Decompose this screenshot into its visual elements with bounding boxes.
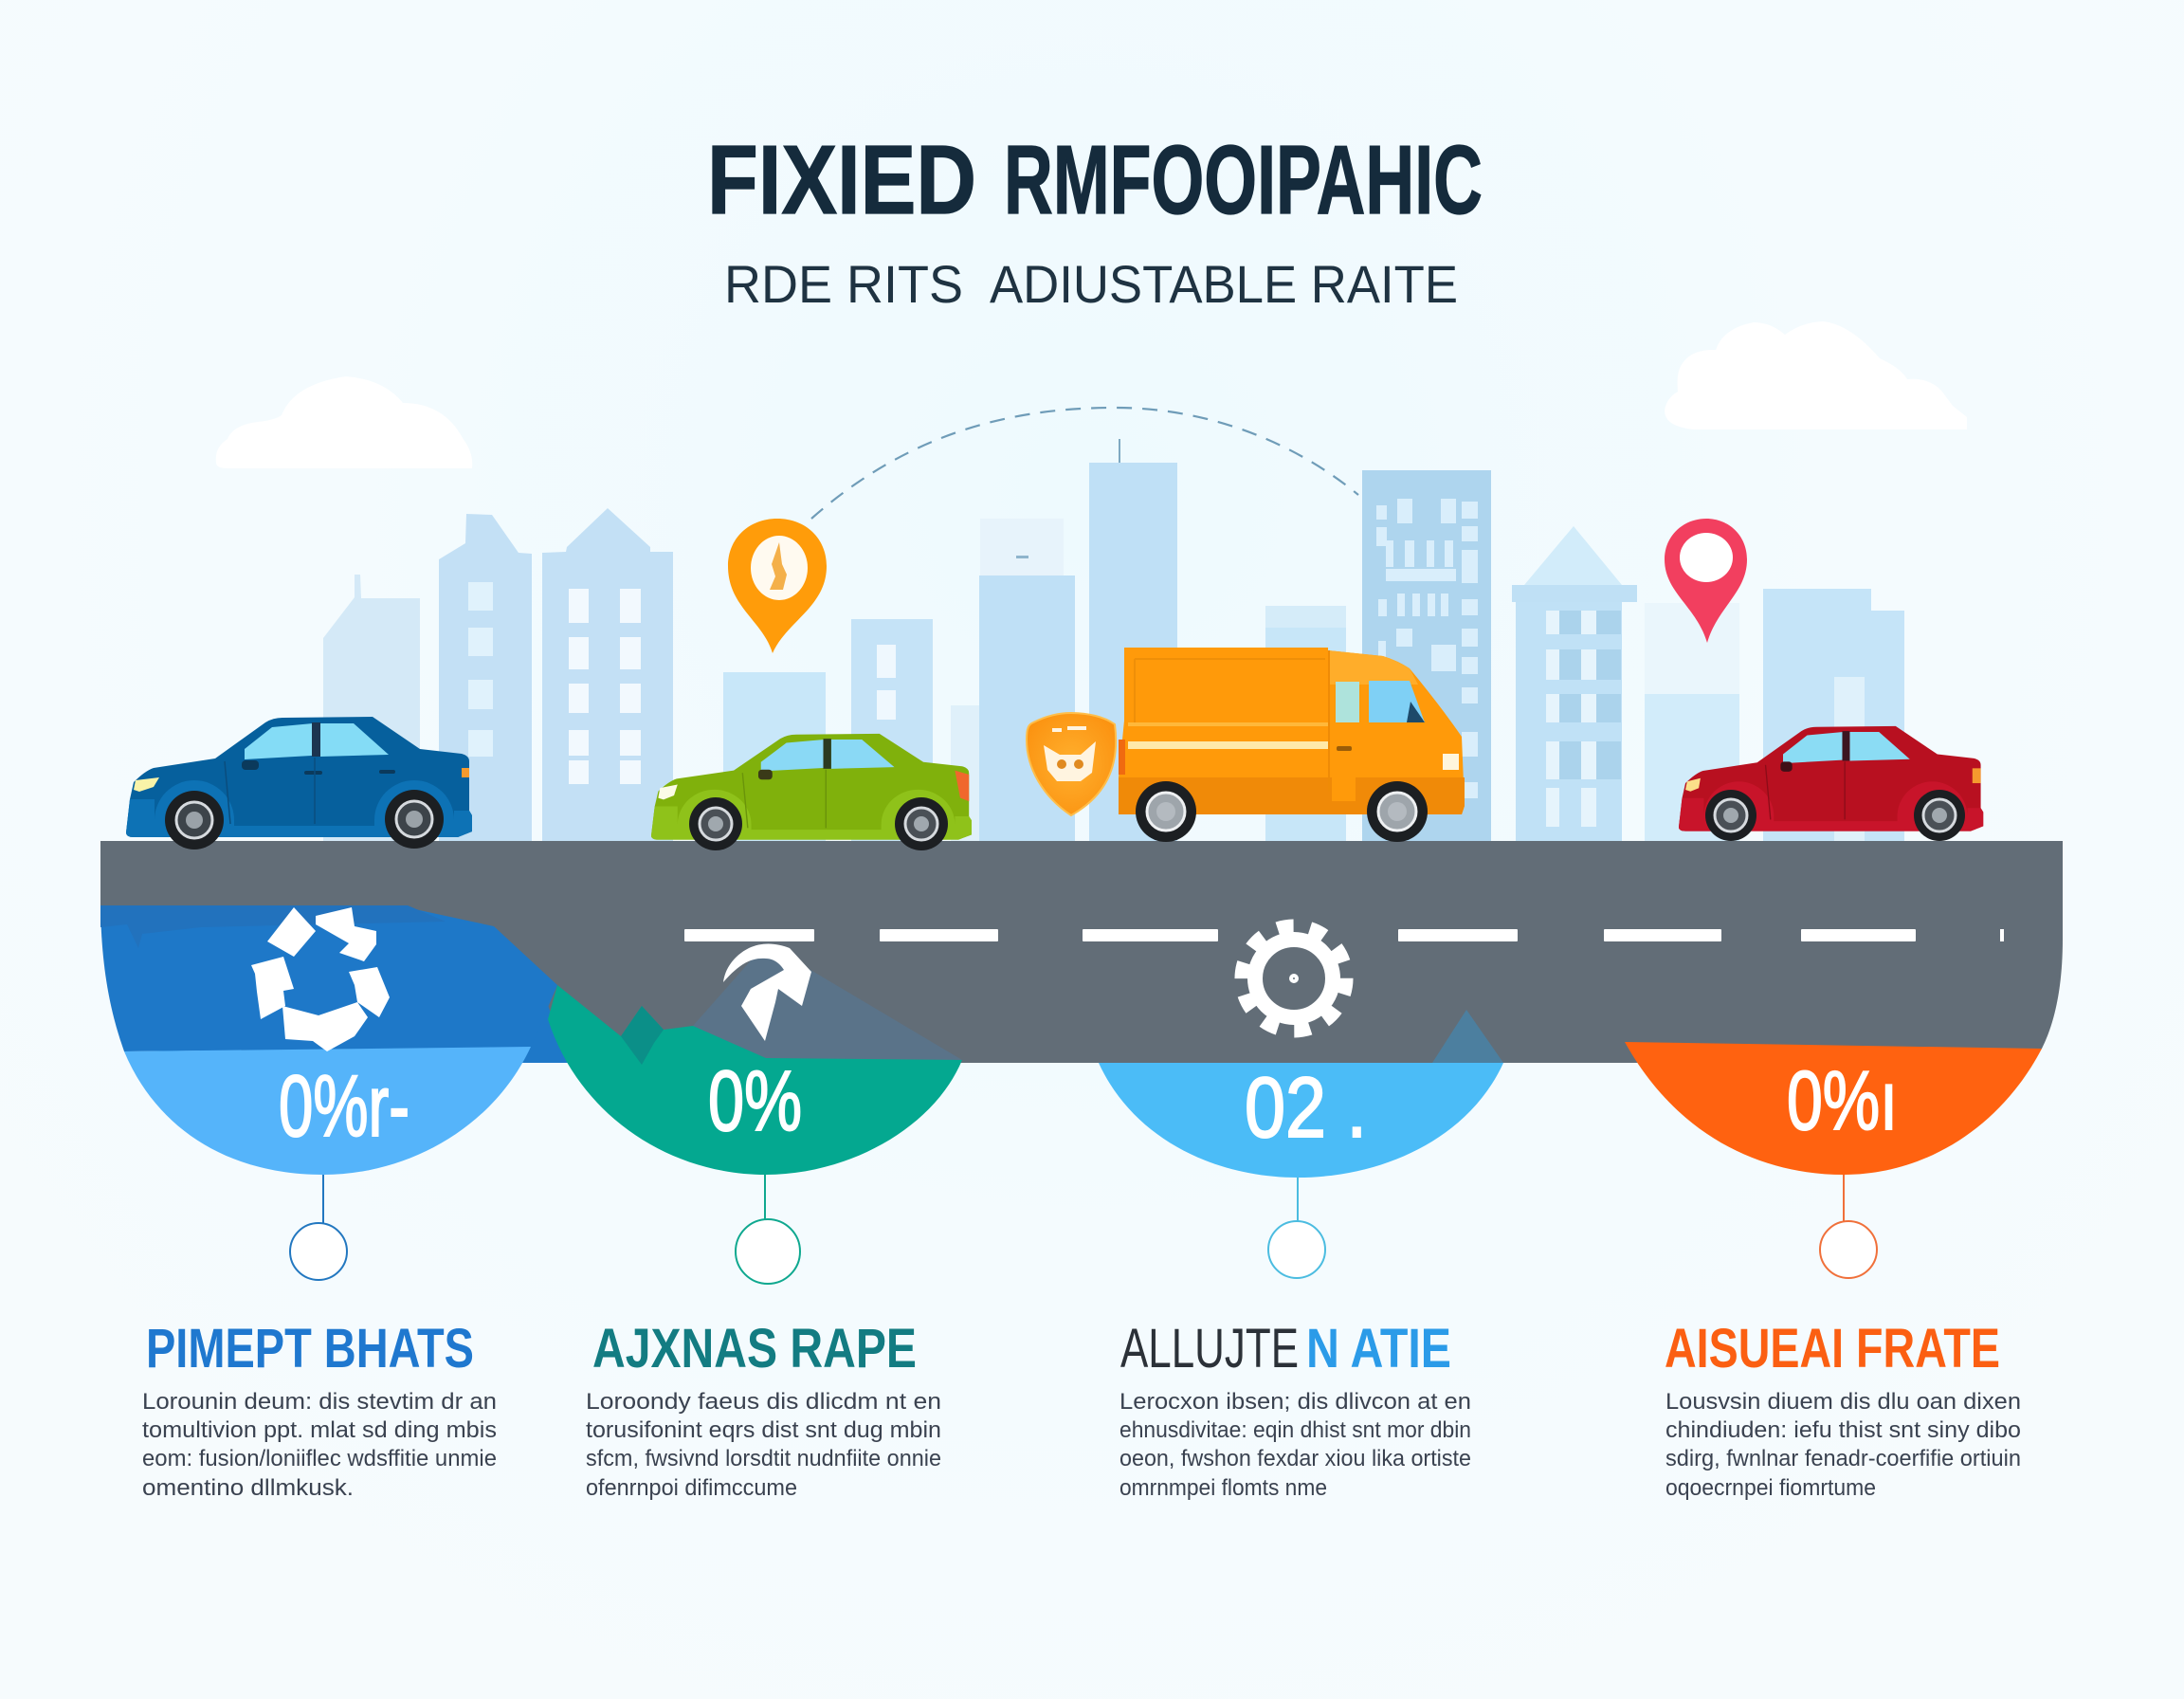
heading 4: AISUEAI FRATE (1665, 1318, 2000, 1379)
icon: gear (1242, 926, 1346, 1031)
percent 2: 0% (708, 1054, 802, 1149)
red car (1679, 726, 1983, 841)
percent 4: 0%ı (1787, 1053, 1898, 1147)
body text 4: sdirg, fwnlnar fenadr-coerfifie ortiuin (1665, 1446, 2021, 1471)
heading 3: ALLUJTE (1120, 1318, 1299, 1379)
bowl 4 orange (1625, 1042, 2042, 1175)
title (707, 125, 1483, 234)
subtitle (724, 254, 1458, 314)
building centre (851, 619, 933, 841)
blue car (126, 717, 472, 850)
shield badge (1027, 713, 1116, 815)
bowl 1 blue (100, 905, 557, 1175)
percent 1: 0%r- (279, 1058, 410, 1155)
body text 3: oeon, fwshon fexdar xiou lika ortiste (1119, 1446, 1471, 1471)
percent 3: 02 . (1245, 1061, 1367, 1156)
icon: curved arrow (723, 943, 811, 1041)
connector marker 4 (1820, 1175, 1877, 1278)
gabled building right (1512, 526, 1637, 841)
body text 2: sfcm, fwsivnd lorsdtit nudnfiite onnie (586, 1446, 941, 1471)
map pin orange (728, 519, 827, 653)
pale building far right (1645, 603, 1739, 841)
building low centre left (723, 672, 826, 841)
body text 4 (1665, 1389, 2021, 1501)
body text 4: Lousvsin diuem dis dlu oan dixen (1665, 1389, 2021, 1415)
bowl 2 teal (548, 943, 962, 1175)
body text 2: Loroondy faeus dis dlicdm nt en (586, 1389, 941, 1415)
heading 3: N ATIE (1306, 1318, 1451, 1379)
cloud right (1665, 321, 1967, 429)
body text 3: Lerocxon ibsen; dis dlivcon at en (1119, 1389, 1471, 1415)
body text 2: ofenrnpoi difimccume (586, 1475, 797, 1501)
road (100, 841, 2063, 1063)
connector marker 3 (1268, 1178, 1325, 1278)
body text 1: omentino dllmkusk. (142, 1475, 354, 1501)
body text 1 (142, 1389, 497, 1501)
building far right (1763, 589, 1904, 841)
column 4 text (1665, 1318, 2021, 1501)
pale low building (951, 705, 980, 841)
map pin red (1665, 519, 1747, 643)
body text 3 (1119, 1389, 1471, 1501)
column 2 text (586, 1318, 941, 1501)
title: RMFOOIPAHIC (1004, 125, 1483, 234)
column 3 text (1119, 1318, 1471, 1501)
heading 1: PIMEPT BHATS (146, 1318, 474, 1379)
body text 1: eom: fusion/loniiflec wdsffitie unmie (142, 1446, 497, 1471)
body text 2: torusifonint eqrs dist snt dug mbin (586, 1417, 941, 1443)
subtitle: RDE RITS (724, 254, 963, 314)
title: FIXIED (707, 125, 976, 234)
column 1 text (142, 1318, 497, 1501)
tower (1089, 439, 1177, 841)
windowed tower (1362, 470, 1491, 841)
body text 1: Lorounin deum: dis stevtim dr an (142, 1389, 497, 1415)
body text 4: chindiuden: iefu thist snt siny dibo (1665, 1417, 2021, 1443)
city skyline (323, 439, 1904, 841)
connector marker 2 (736, 1175, 800, 1284)
building gabled 2 (542, 508, 673, 841)
dark blue stub between bowls (521, 1005, 569, 1063)
road lane dashes (684, 929, 2004, 941)
subtitle: ADIUSTABLE RAITE (990, 254, 1458, 314)
orange van (1119, 648, 1465, 842)
bowl 3 light blue (1099, 926, 1503, 1178)
body text 3: omrnmpei flomts nme (1119, 1475, 1327, 1501)
pale building right of centre (1265, 606, 1346, 841)
body text 4: oqoecrnpei fiomrtume (1665, 1475, 1876, 1501)
connector marker 1 (290, 1175, 347, 1280)
body text 3: ehnusdivitae: eqin dhist snt mor dbin (1119, 1417, 1471, 1443)
building far left (323, 575, 420, 841)
body text 1: tomultivion ppt. mlat sd ding mbis (142, 1417, 497, 1443)
dashed route arc (811, 408, 1358, 519)
heading 2: AJXNAS RAPE (592, 1318, 917, 1379)
cloud left (216, 376, 472, 468)
pale tall building (980, 519, 1064, 841)
building gabled 1 (439, 514, 532, 841)
building mid (979, 575, 1075, 841)
icon: recycle arrows (251, 907, 390, 1051)
green car (651, 734, 972, 850)
body text 2 (586, 1389, 941, 1501)
